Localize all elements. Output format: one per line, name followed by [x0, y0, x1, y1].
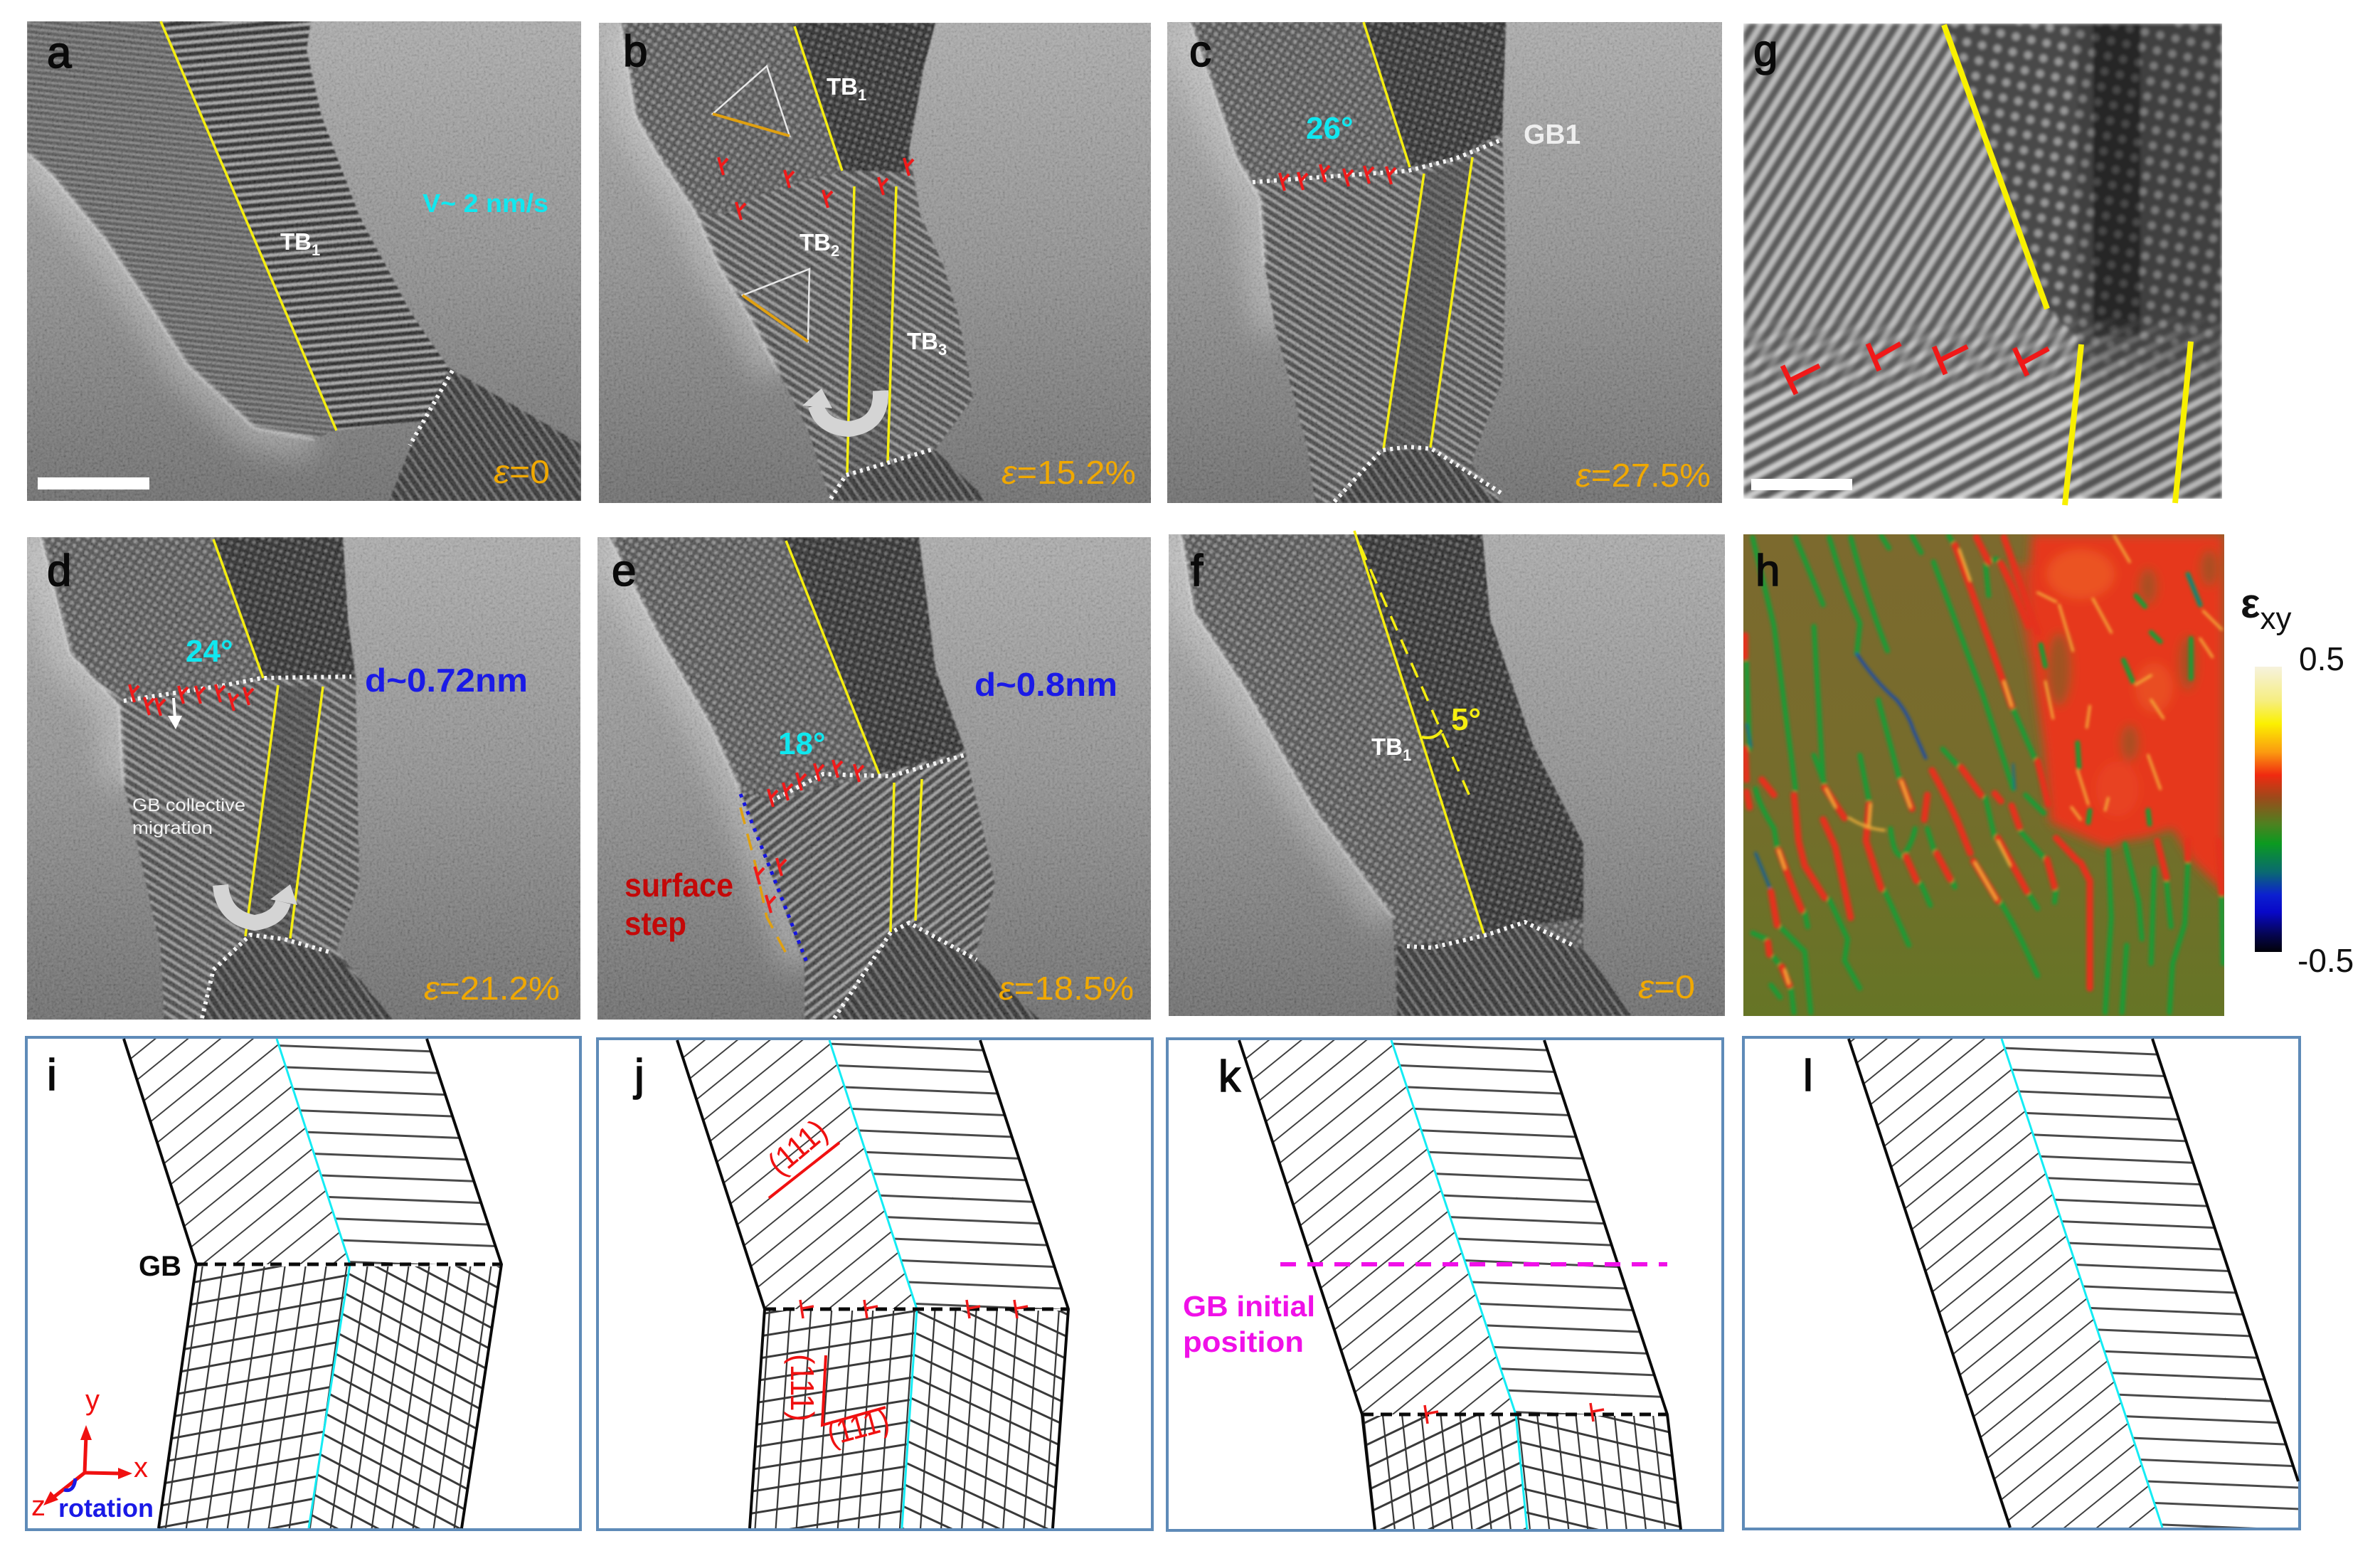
lower grain hatching [159, 1266, 501, 1528]
miller index lower: (111) [823, 1401, 893, 1453]
velocity label: V~ 2 nm/s [423, 189, 548, 218]
label d: d [47, 546, 71, 596]
axis labels: z [31, 1491, 46, 1522]
TB labels: 2 [831, 242, 839, 260]
TB1 label: 1 [312, 241, 320, 259]
twin boundary lines [1364, 22, 1472, 449]
TB1 label: 1 [1403, 746, 1411, 764]
scale minimum: -0.5 [2297, 942, 2354, 979]
TB labels: TB [907, 328, 938, 354]
upper Thompson triangle [713, 66, 790, 136]
label i: i [47, 1051, 57, 1100]
colour scale [2255, 667, 2282, 952]
migration direction arrow [168, 698, 182, 729]
label k: k [1218, 1052, 1241, 1101]
grain boundary dotted line [831, 449, 934, 499]
label l: l [1803, 1052, 1813, 1101]
strain label: ε=18.5% [999, 970, 1134, 1007]
wire outline [1239, 1040, 1681, 1530]
wire outline [677, 1040, 1068, 1528]
label g: g [1753, 26, 1778, 75]
surface step label: surface [625, 867, 733, 904]
twin boundary [2002, 1039, 2162, 1528]
GB label: GB [139, 1251, 181, 1282]
surface step label: step [625, 905, 686, 942]
initial boundary position [1280, 1262, 1667, 1266]
dislocation markers [755, 760, 864, 913]
upper grain hatching [124, 1039, 501, 1264]
gap label: d~0.8nm [974, 666, 1117, 703]
lower grain hatching [1362, 1416, 1681, 1529]
dislocation markers [129, 684, 253, 716]
grain boundary dotted lines [1253, 139, 1502, 502]
twin boundary [1391, 1040, 1527, 1530]
scale bar [1751, 479, 1852, 490]
grain boundary [1362, 1413, 1667, 1416]
twin boundary line [161, 21, 336, 430]
twin boundary [829, 1040, 917, 1528]
grain boundary dotted line [410, 371, 452, 445]
slip plane marker [769, 1143, 839, 1198]
axis labels: x [134, 1452, 148, 1483]
label h: h [1755, 546, 1780, 596]
rotation label: rotation [58, 1493, 154, 1523]
dislocation markers [800, 1300, 1028, 1318]
panel g: high-resolution lattice image [1743, 23, 2222, 505]
coordinate axes [43, 1425, 132, 1505]
grain boundary dotted lines [771, 755, 977, 1018]
strain symbol: ε [2241, 581, 2261, 627]
rotation direction arc [64, 1478, 75, 1491]
panel c: TEM image at 27.5 percent strain [1167, 22, 1722, 503]
rotation arrow [221, 884, 297, 923]
label e: e [612, 546, 636, 596]
strain label: ε=0 [494, 453, 550, 490]
migration label [132, 795, 245, 838]
miller index upper: (111) [760, 1112, 834, 1182]
lower grain hatching [750, 1311, 1068, 1528]
angle label: 24° [186, 634, 233, 669]
TB labels: TB [827, 73, 858, 100]
angle label: 5° [1451, 702, 1481, 737]
strain label: ε=15.2% [1002, 454, 1136, 491]
surface step traces [740, 794, 807, 962]
label c: c [1189, 27, 1211, 76]
panel k: schematic with boundary moved down [1167, 1039, 1723, 1530]
migration label: migration [132, 818, 213, 838]
dislocation markers [718, 157, 913, 220]
initial position label: GB initial [1183, 1290, 1315, 1323]
twin boundary lines [786, 541, 922, 932]
twin boundary [277, 1039, 350, 1528]
gap label: d~0.72nm [365, 662, 528, 699]
lower Thompson triangle [743, 269, 809, 342]
twin boundary lines [1944, 25, 2191, 505]
TB labels: 1 [858, 86, 866, 104]
colour bar with strain legend [2241, 581, 2354, 979]
label b: b [623, 27, 647, 76]
panel e: TEM image at 18.5 percent strain [597, 537, 1151, 1020]
label j: j [633, 1051, 644, 1100]
initial position label [1183, 1290, 1315, 1358]
angle label: 18° [778, 726, 826, 761]
scale maximum: 0.5 [2299, 640, 2344, 677]
wire outline [1849, 1039, 2298, 1528]
TB labels [799, 73, 947, 359]
TB1 label: TB [280, 228, 312, 255]
twin boundary lines [795, 26, 896, 474]
grain boundary dotted line [1407, 922, 1572, 948]
grain boundary [765, 1308, 1068, 1311]
migration label: GB collective [132, 795, 245, 815]
initial position label: position [1183, 1325, 1304, 1358]
twin boundary line [1354, 531, 1484, 933]
TB labels: 3 [938, 341, 947, 359]
angle bracket [1422, 730, 1442, 738]
grain boundary [196, 1262, 501, 1266]
rotation arrow [802, 388, 881, 429]
label a: a [47, 28, 72, 78]
surface step label [625, 867, 733, 942]
wire outline [124, 1039, 501, 1528]
miller index vertical: (111) [784, 1354, 821, 1422]
panel l: schematic after boundary exit [1743, 1037, 2300, 1529]
panel j: schematic with migrating boundary and dislocations [597, 1039, 1152, 1530]
upper grain hatching [1239, 1040, 1667, 1414]
twin hatching [1849, 1039, 2298, 1528]
label f: f [1191, 546, 1204, 596]
grain boundary dotted lines [124, 677, 351, 1018]
upper grain hatching [677, 1040, 1068, 1309]
strain symbol: xy [2261, 601, 2292, 636]
strain label: ε=21.2% [424, 970, 560, 1007]
panel a: TEM image at zero strain [27, 21, 581, 501]
TB labels: TB [799, 229, 831, 255]
panel h: shear strain map [1743, 534, 2224, 1016]
scale bar [38, 477, 149, 489]
panel d: TEM image at 21.2 percent strain during unloading [27, 537, 580, 1020]
axis labels: y [85, 1385, 100, 1416]
strain label: ε=0 [1638, 968, 1695, 1005]
twin boundary lines [213, 539, 323, 938]
GB1 label: GB1 [1524, 120, 1581, 150]
angle label: 26° [1306, 111, 1354, 146]
panel i: schematic with grain boundary [26, 1037, 580, 1530]
dislocation markers [1425, 1403, 1604, 1424]
lower bracket [822, 1355, 886, 1425]
dislocation markers [1783, 344, 2049, 394]
panel f: TEM image after full unloading [1169, 531, 1725, 1016]
axis labels [31, 1385, 148, 1522]
dashed reference line [1360, 546, 1471, 799]
dislocation markers [1280, 164, 1396, 191]
strain label: ε=27.5% [1576, 457, 1711, 494]
panel b: TEM image at 15.2 percent strain [599, 23, 1151, 503]
TB1 label: TB [1371, 734, 1403, 760]
